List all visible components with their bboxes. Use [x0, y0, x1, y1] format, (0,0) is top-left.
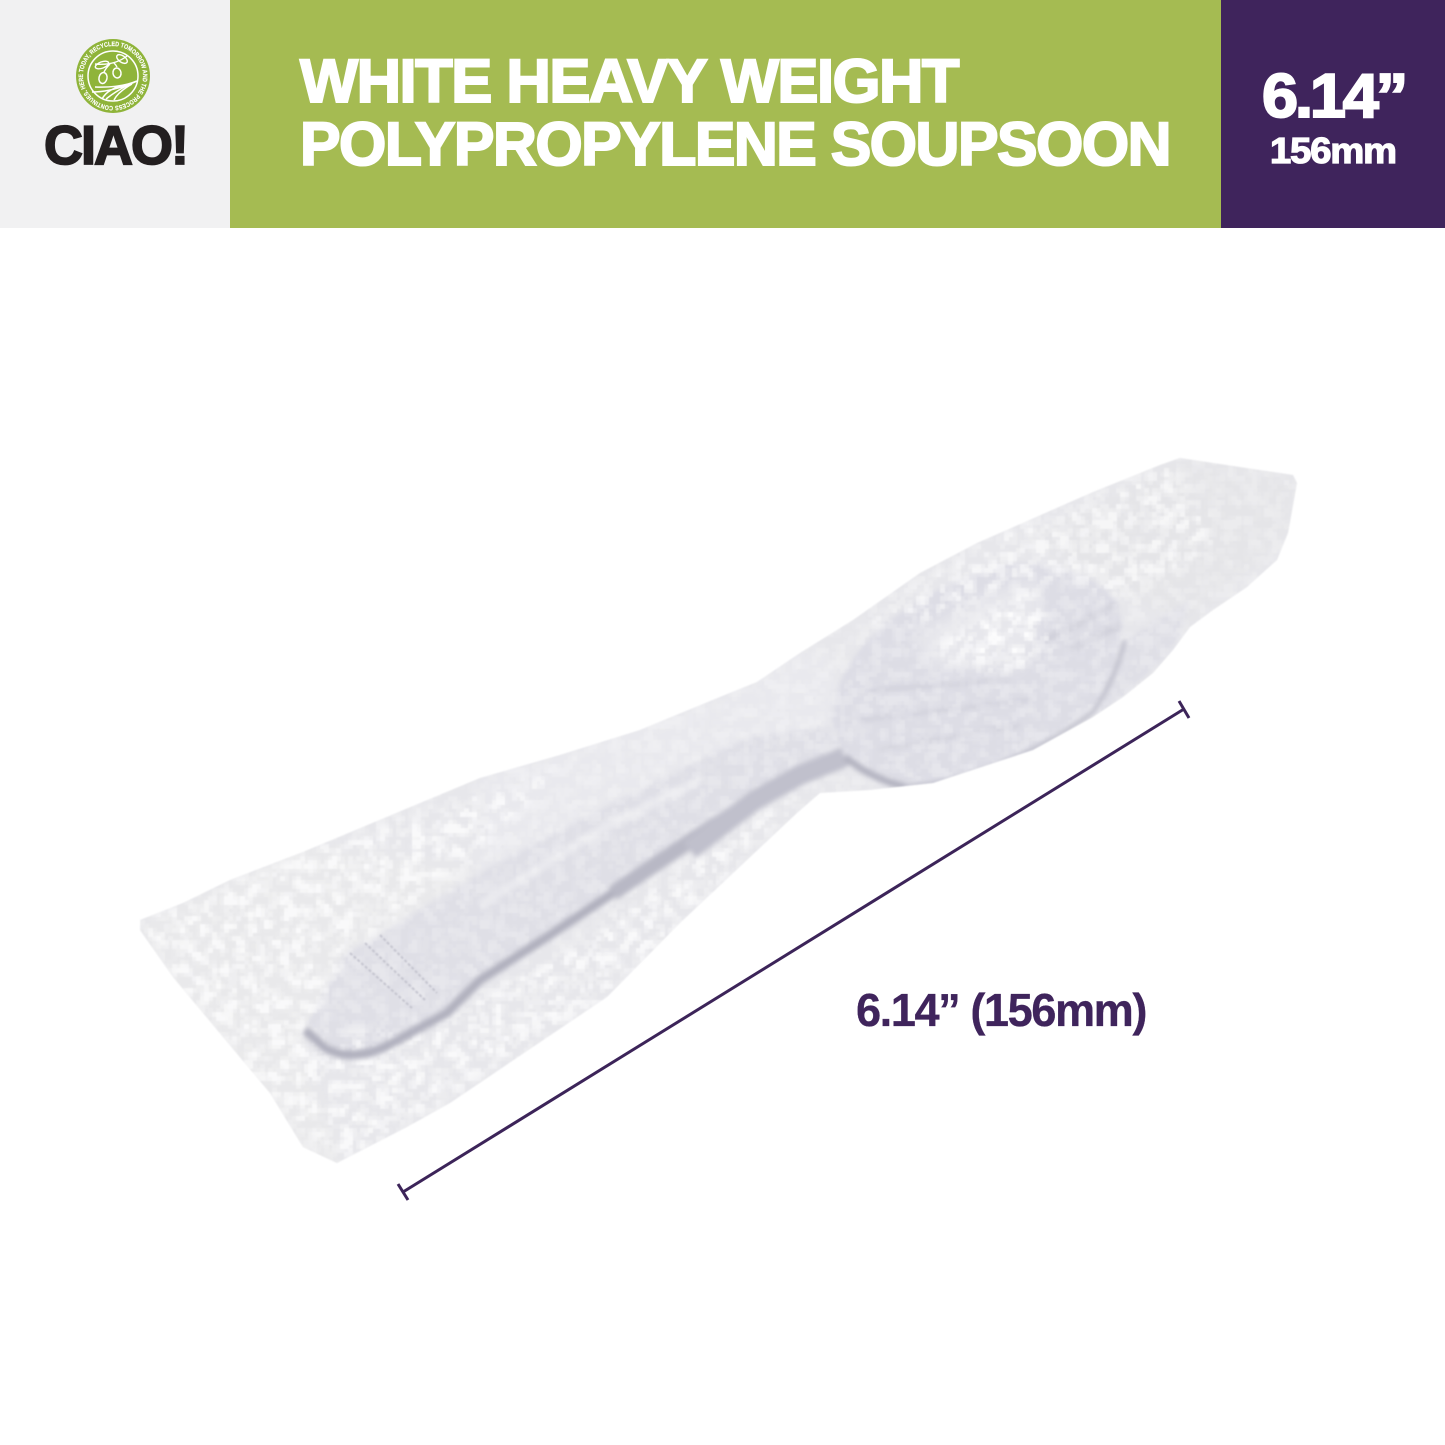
spoon handle: [307, 727, 845, 1057]
sparkle texture: [148, 468, 1212, 1156]
handle engraving: [350, 935, 437, 1008]
logo badge: CONTINUES. HERE TODAY, RECYCLED TOMORROW AND THE PROCESS: [78, 42, 148, 110]
title line 1: WHITE HEAVY WEIGHT: [300, 47, 959, 115]
spoon bowl: [832, 563, 1121, 787]
dimension arrow: [398, 701, 1189, 1200]
spoon shadow band: [305, 640, 1125, 1055]
header: size panel: [1221, 0, 1445, 228]
logo wordmark: CIAO!: [44, 114, 187, 176]
size in inches: 6.14”: [1262, 62, 1405, 131]
header: logo panel: [0, 0, 230, 228]
dimension label: 6.14” (156mm): [856, 984, 1146, 1036]
title line 2: POLYPROPYLENE SOUPSOON: [300, 110, 1170, 178]
product image: wrapped spoon: [130, 450, 1310, 1175]
size in millimetres: 156mm: [1270, 130, 1396, 171]
header: title panel: [230, 0, 1221, 228]
plastic wrapper: [130, 450, 1310, 1175]
